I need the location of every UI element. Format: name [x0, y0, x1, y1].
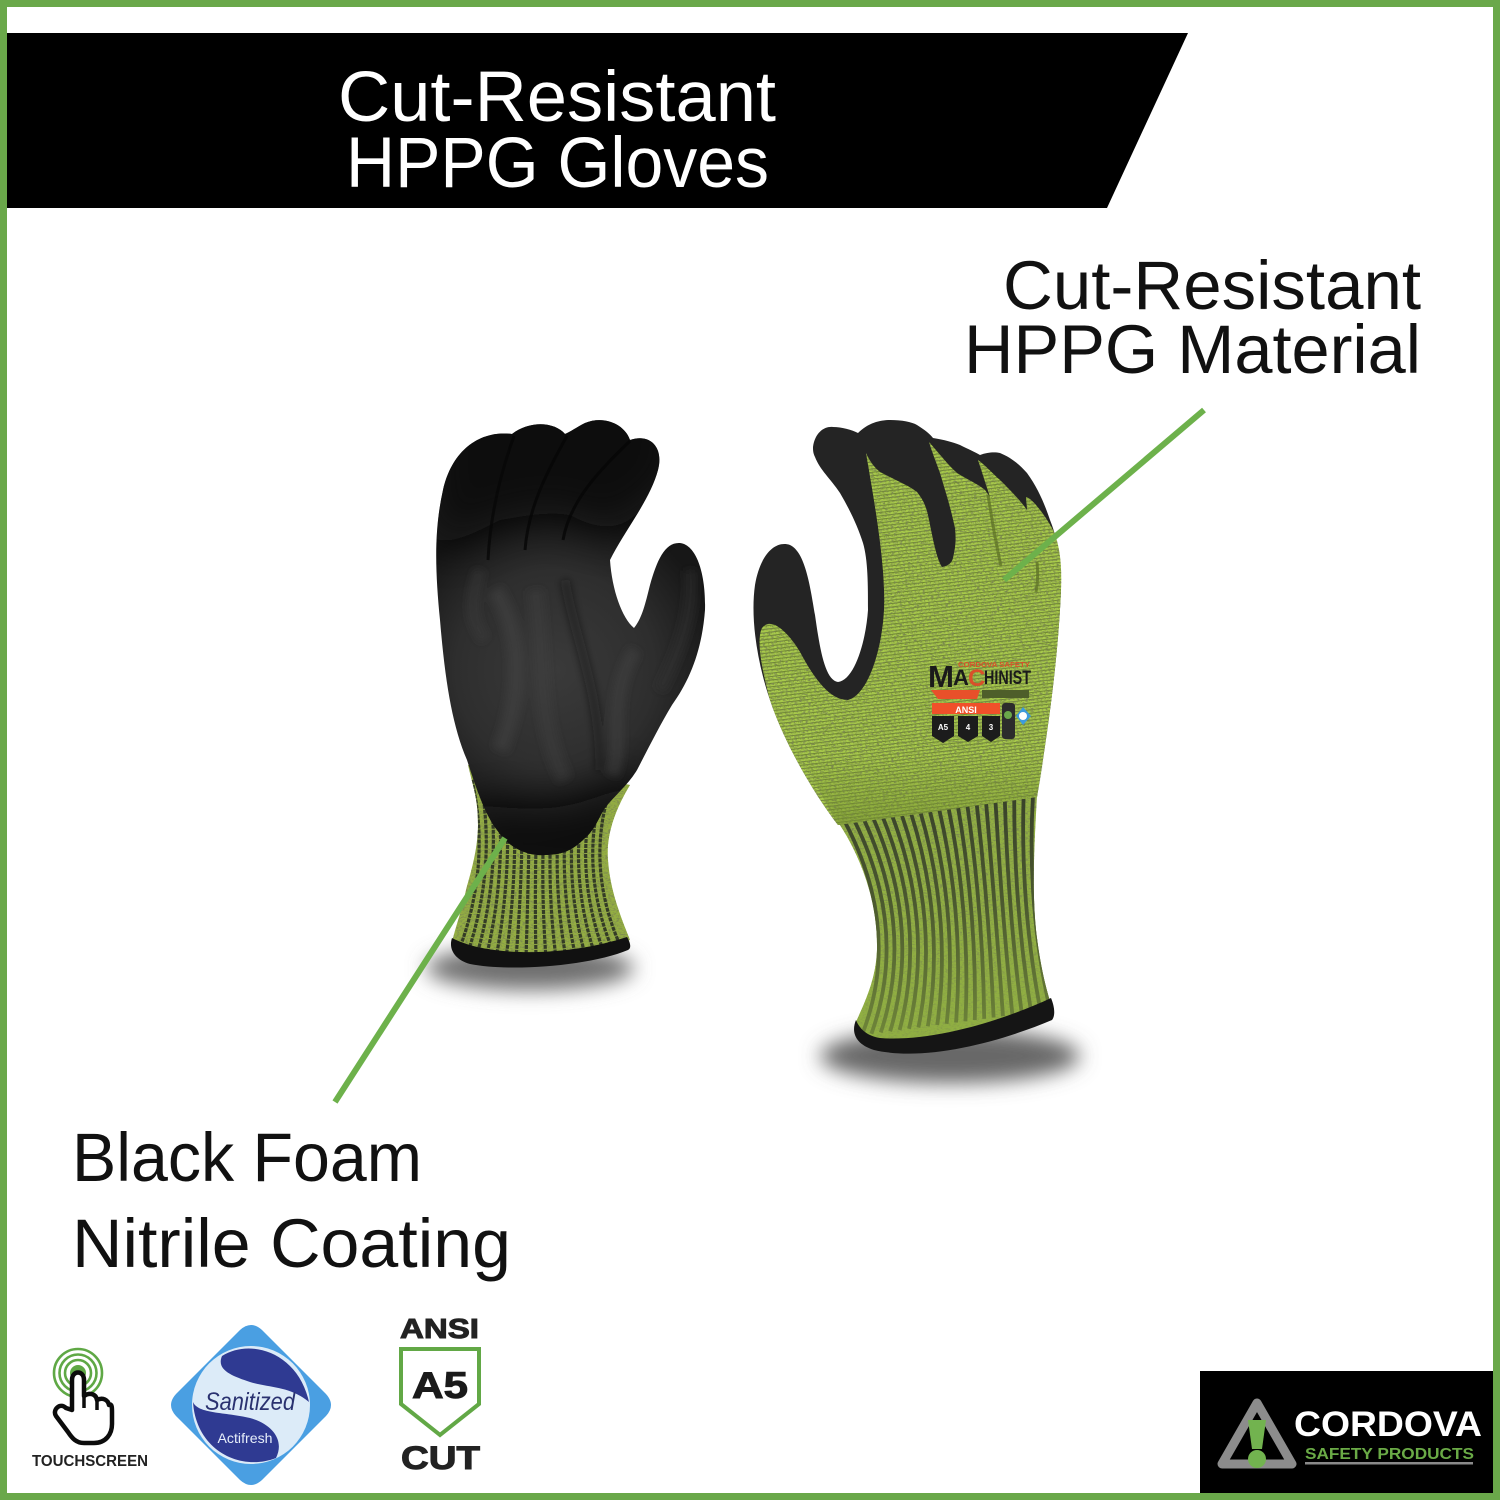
darker finger zone [436, 420, 660, 559]
glove label: Machinist branding: 4 [966, 723, 971, 732]
darker lower palm [478, 766, 639, 856]
right glove black coating on fingers and thumb [753, 420, 1061, 825]
glove label: Machinist branding: A5 [938, 723, 949, 732]
logo: Cordova Safety Products [1200, 1371, 1494, 1493]
icon: ANSI A5 cut shield [400, 1313, 481, 1476]
logo: Cordova Safety Products: CORDOVA [1294, 1405, 1482, 1444]
icon: ANSI A5 cut shield: ANSI [400, 1313, 479, 1344]
glove label: Machinist branding [928, 659, 1031, 743]
logo: Cordova Safety Products: SAFETY PRODUCTS [1305, 1446, 1474, 1463]
left glove cuff [451, 765, 630, 968]
callout: black foam nitrile coating: Black Foam [72, 1119, 422, 1196]
icon: Sanitized Actifresh badge [171, 1325, 331, 1485]
glove label: Machinist branding: HINIST [984, 668, 1031, 689]
left glove palm coating [436, 420, 706, 856]
leader line: nitrile coating [335, 838, 505, 1102]
leader line: HPPG material [1004, 410, 1204, 580]
glove label: Machinist branding: 3 [989, 723, 994, 732]
glove label: Machinist branding: C [968, 665, 985, 692]
shadow under left glove [426, 946, 634, 990]
callout: black foam nitrile coating: Nitrile Coating [72, 1205, 511, 1282]
callout: black foam nitrile coating [72, 1119, 511, 1282]
right glove green HPPG knit [760, 442, 1061, 825]
finger separations [486, 494, 580, 560]
glove label: Machinist branding: ANSI [955, 705, 977, 715]
title: HPPG Gloves [346, 124, 769, 203]
title: Cut-Resistant [338, 58, 776, 137]
glove label: Machinist branding: CORDOVA SAFETY [958, 662, 1030, 669]
icon: ANSI A5 cut shield: A5 [412, 1365, 468, 1406]
icon: ANSI A5 cut shield: CUT [401, 1440, 481, 1476]
icon: touchscreen [32, 1349, 148, 1470]
title banner [7, 33, 1188, 208]
right glove cuff [830, 790, 1060, 1055]
callout: cut-resistant HPPG material [964, 247, 1421, 388]
shadow under right glove [820, 1029, 1080, 1083]
palm folds [473, 570, 691, 780]
callout: cut-resistant HPPG material: HPPG Material [964, 311, 1421, 388]
left glove: palm view [426, 380, 710, 990]
icon: Sanitized Actifresh badge: Sanitized [205, 1388, 296, 1416]
right glove: back view [753, 420, 1080, 1083]
icon: Sanitized Actifresh badge: Actifresh [218, 1430, 272, 1446]
title [338, 58, 776, 203]
callout: cut-resistant HPPG material: Cut-Resistant [1003, 247, 1421, 324]
touchscreen label: TOUCHSCREEN [32, 1453, 148, 1470]
glove label: Machinist branding: A [953, 665, 969, 690]
glove label: Machinist branding: M [928, 659, 954, 694]
